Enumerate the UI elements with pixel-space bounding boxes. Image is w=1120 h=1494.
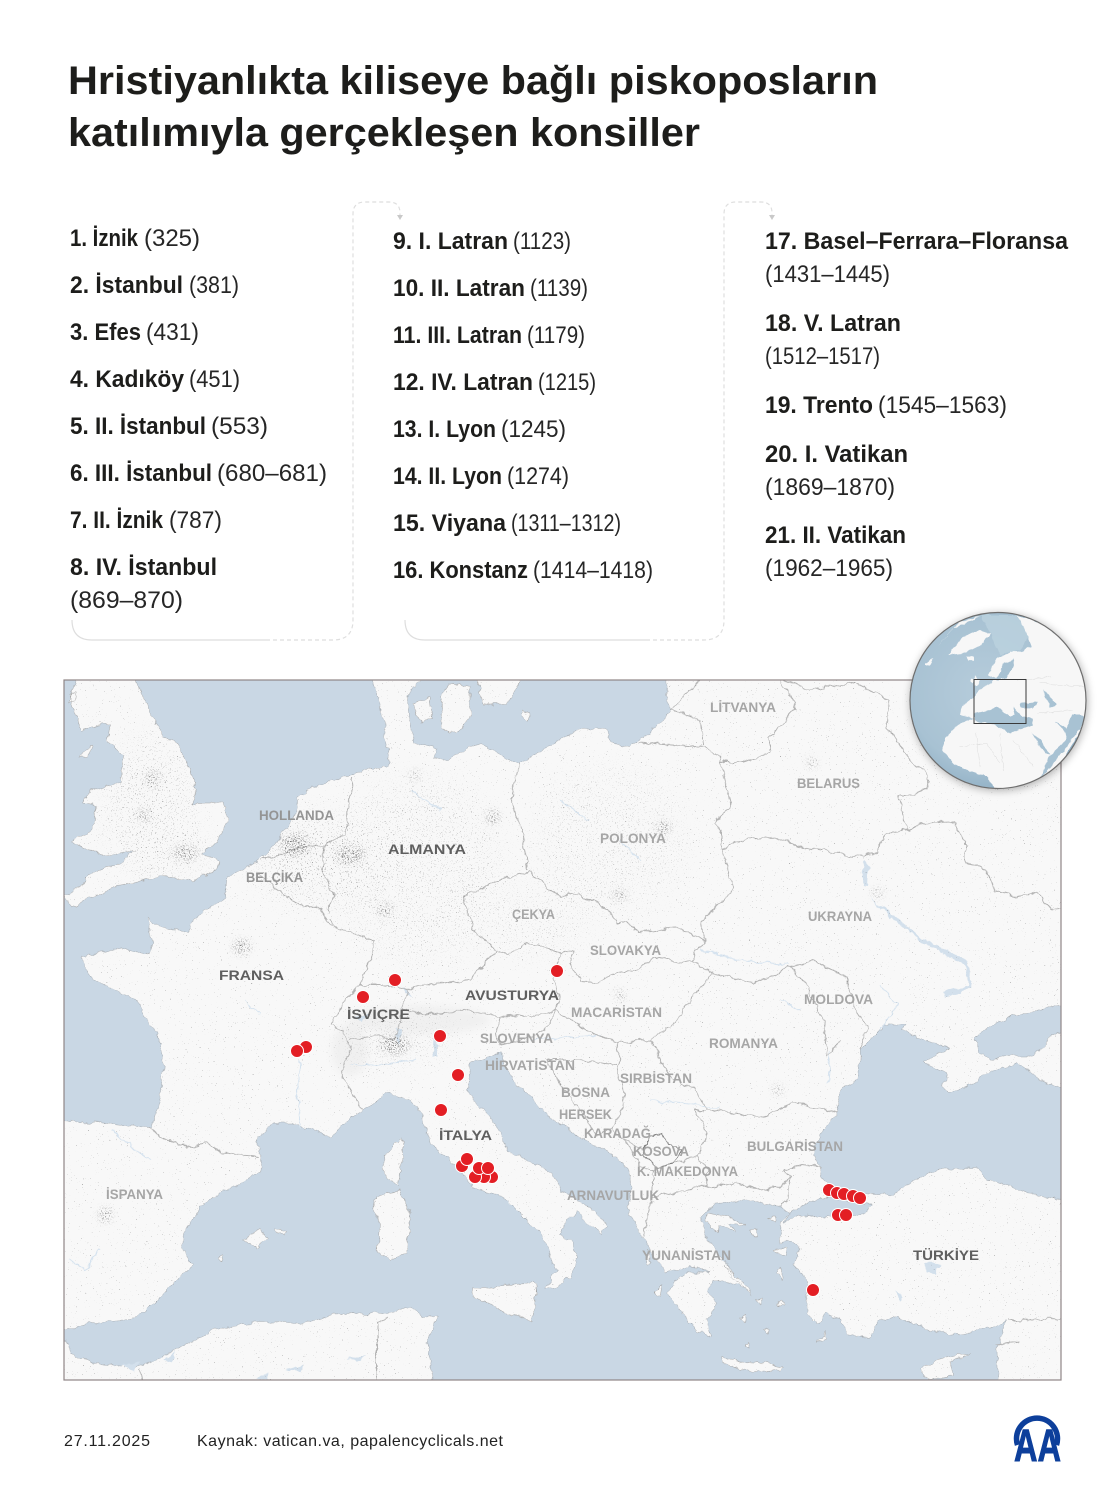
item 17: (1431–1445): [765, 261, 890, 288]
labels: dark country names: [219, 841, 979, 1263]
item 21: 21. II. Vatikan: [765, 522, 906, 549]
item 4: (451): [189, 366, 240, 393]
item 5: (553): [211, 413, 268, 440]
item 13: (1245): [501, 416, 566, 443]
item 4: 4. Kadıköy: [70, 366, 185, 393]
item 21: (1962–1965): [765, 555, 893, 582]
item 18: 18. V. Latran: [765, 310, 901, 337]
item 6: 6. III. İstanbul: [70, 460, 212, 487]
title: Hristiyanlıkta kiliseye bağlı piskoposların: [68, 59, 878, 103]
labels: dark country names: AVUSTURYA: [465, 987, 559, 1003]
item 1: [70, 225, 200, 252]
item 19: [765, 392, 1007, 419]
labels: light country names: MACARİSTAN: [571, 1004, 662, 1020]
item 5: 5. II. İstanbul: [70, 413, 206, 440]
labels: light country names: HOLLANDA: [259, 807, 334, 823]
item 13: [393, 416, 566, 443]
item 3: [70, 319, 199, 346]
item 11: (1179): [527, 322, 585, 349]
labels: light country names: K. MAKEDONYA: [637, 1163, 738, 1179]
map of Europe: [50, 670, 1075, 1395]
item 14: (1274): [507, 463, 569, 490]
labels: dark country names: TÜRKİYE: [913, 1247, 979, 1263]
item 11: 11. III. Latran: [393, 322, 522, 349]
title: katılımıyla gerçekleşen konsiller: [68, 111, 700, 155]
item 1: 1. İznik: [70, 225, 139, 252]
item 10: (1139): [530, 275, 588, 302]
item 16: (1414–1418): [533, 557, 653, 584]
item 12: 12. IV. Latran: [393, 369, 533, 396]
item 17: 17. Basel–Ferrara–Floransa: [765, 228, 1069, 255]
item 13: 13. I. Lyon: [393, 416, 496, 443]
item 17: [765, 228, 1069, 288]
item 15: (1311–1312): [511, 510, 621, 537]
source: Kaynak: vatican.va, papalencyclicals.net: [197, 1433, 504, 1450]
item 9: (1123): [513, 228, 571, 255]
labels: light country names: MOLDOVA: [804, 991, 873, 1007]
item 20: [765, 441, 908, 501]
labels: dark country names: ALMANYA: [388, 841, 466, 857]
logo: Anadolu Agency: AA: [1014, 1420, 1061, 1471]
labels: light country names: POLONYA: [600, 830, 666, 846]
item 7: (787): [169, 507, 222, 534]
labels: light country names: HERSEK: [559, 1106, 612, 1122]
labels: light country names: BELÇİKA: [246, 869, 303, 885]
item 1: (325): [144, 225, 200, 252]
labels: light country names: ROMANYA: [709, 1035, 778, 1051]
arrow: connector from first column to second column: [72, 202, 403, 640]
labels: light country names: LİTVANYA: [710, 699, 776, 715]
item 20: (1869–1870): [765, 474, 895, 501]
item 18: (1512–1517): [765, 343, 880, 370]
item 20: 20. I. Vatikan: [765, 441, 908, 468]
item 9: 9. I. Latran: [393, 228, 508, 255]
labels: dark country names: İSVİÇRE: [347, 1006, 410, 1022]
item 14: 14. II. Lyon: [393, 463, 502, 490]
item 6: [70, 460, 327, 487]
item 15: [393, 510, 621, 537]
item 3: (431): [146, 319, 199, 346]
item 14: [393, 463, 569, 490]
labels: light country names: İSPANYA: [106, 1186, 163, 1202]
item 8: (869–870): [70, 587, 183, 614]
labels: light country names: ÇEKYA: [512, 906, 555, 922]
list: councils 1-8: [70, 225, 327, 614]
item 16: [393, 557, 653, 584]
labels: light country names: ARNAVUTLUK: [567, 1187, 659, 1203]
item 2: (381): [189, 272, 239, 299]
list: councils 9-16: [393, 228, 653, 584]
arrow: connector from second column to third column: [405, 202, 775, 640]
item 9: [393, 228, 571, 255]
labels: light country names: [106, 699, 873, 1263]
item 19: (1545–1563): [878, 392, 1007, 419]
item 21: [765, 522, 906, 582]
item 18: [765, 310, 901, 370]
labels: light country names: SIRBİSTAN: [620, 1070, 692, 1086]
item 3: 3. Efes: [70, 319, 141, 346]
labels: light country names: BELARUS: [797, 775, 860, 791]
council location markers: [290, 964, 866, 1296]
labels: light country names: UKRAYNA: [808, 908, 872, 924]
item 10: 10. II. Latran: [393, 275, 525, 302]
labels: light country names: YUNANİSTAN: [642, 1247, 731, 1263]
locator rectangle: [974, 680, 1026, 724]
labels: dark country names: İTALYA: [439, 1127, 492, 1143]
labels: light country names: SLOVENYA: [480, 1030, 553, 1046]
item 8: 8. IV. İstanbul: [70, 554, 217, 581]
item 15: 15. Viyana: [393, 510, 507, 537]
item 8: [70, 554, 217, 614]
item 7: 7. II. İznik: [70, 507, 164, 534]
item 2: 2. İstanbul: [70, 272, 183, 299]
item 19: 19. Trento: [765, 392, 873, 419]
item 6: (680–681): [217, 460, 327, 487]
labels: light country names: BULGARİSTAN: [747, 1138, 843, 1154]
labels: light country names: KARADAĞ: [584, 1124, 651, 1141]
labels: light country names: BOSNA: [561, 1084, 610, 1100]
list: councils 17-21: [765, 228, 1069, 582]
title: [68, 59, 878, 155]
locator globe: [910, 612, 1090, 791]
labels: light country names: HİRVATİSTAN: [485, 1057, 575, 1073]
item 12: (1215): [538, 369, 596, 396]
labels: light country names: KOSOVA: [633, 1143, 689, 1159]
labels: dark country names: FRANSA: [219, 967, 284, 983]
date: 27.11.2025: [64, 1433, 150, 1450]
labels: light country names: SLOVAKYA: [590, 942, 661, 958]
item 16: 16. Konstanz: [393, 557, 528, 584]
